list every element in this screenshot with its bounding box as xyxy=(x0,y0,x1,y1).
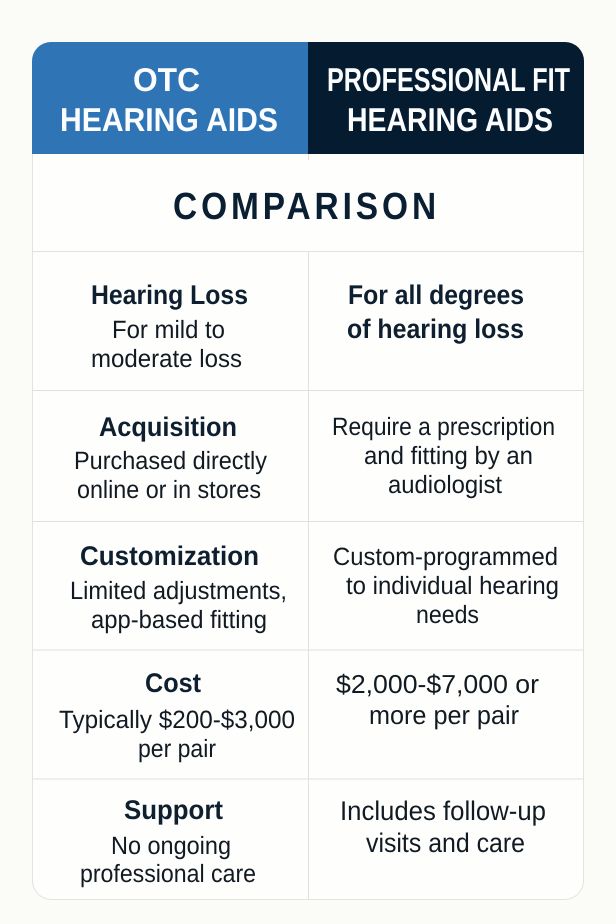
row: customization, professional: needs xyxy=(416,601,479,629)
header: professional fit hearing aids: HEARING AIDS xyxy=(347,101,553,138)
row: cost, OTC: per pair xyxy=(138,735,216,763)
row: hearing loss, OTC: For mild to xyxy=(112,316,225,344)
row: support, professional: Includes follow-up xyxy=(340,796,546,826)
row: cost, professional xyxy=(336,669,539,730)
row: support, professional xyxy=(340,796,546,858)
row: hearing loss, OTC: Hearing Loss xyxy=(91,280,248,310)
row: acquisition, professional xyxy=(332,413,555,499)
row: support, professional: visits and care xyxy=(366,828,525,858)
header: professional fit hearing aids xyxy=(308,42,584,154)
row: cost, professional: more per pair xyxy=(369,700,519,730)
header: OTC hearing aids xyxy=(32,42,308,154)
row: customization, professional: to individual hearing xyxy=(346,572,559,600)
row: customization, OTC xyxy=(70,541,287,634)
row: customization, OTC: Limited adjustments, xyxy=(70,577,287,605)
row: cost, professional: $2,000-$7,000 or xyxy=(336,669,539,699)
header: OTC hearing aids: HEARING AIDS xyxy=(60,101,278,138)
row: acquisition, professional: Require a prescription xyxy=(332,413,555,441)
row: customization, professional: Custom-programmed xyxy=(333,543,558,571)
row: acquisition, professional: audiologist xyxy=(388,471,502,499)
row: customization, professional xyxy=(333,543,559,629)
row: support, OTC: professional care xyxy=(80,860,256,888)
row: hearing loss, OTC xyxy=(91,280,248,373)
row: acquisition, OTC xyxy=(74,412,267,504)
row: hearing loss, professional: of hearing loss xyxy=(347,314,524,344)
row: support, OTC: No ongoing xyxy=(111,832,231,860)
header: OTC hearing aids: OTC xyxy=(133,61,200,98)
row: support, OTC: Support xyxy=(124,795,223,825)
row: acquisition, OTC: Purchased directly xyxy=(74,447,267,475)
row: customization, OTC: app-based fitting xyxy=(91,606,267,634)
row: hearing loss, OTC: moderate loss xyxy=(91,345,242,373)
row: cost, OTC: Cost xyxy=(145,668,201,698)
row: acquisition, OTC: online or in stores xyxy=(77,476,261,504)
row: support, OTC xyxy=(80,795,256,888)
row: acquisition, OTC: Acquisition xyxy=(99,412,237,442)
row: cost, OTC xyxy=(59,668,295,763)
row: hearing loss, professional: For all degrees xyxy=(348,280,524,310)
title: COMPARISON xyxy=(173,186,436,228)
row: acquisition, professional: and fitting by an xyxy=(364,442,533,470)
row: hearing loss, professional xyxy=(347,280,524,344)
row: cost, OTC: Typically $200-$3,000 xyxy=(59,706,295,734)
row: customization, OTC: Customization xyxy=(80,541,259,571)
